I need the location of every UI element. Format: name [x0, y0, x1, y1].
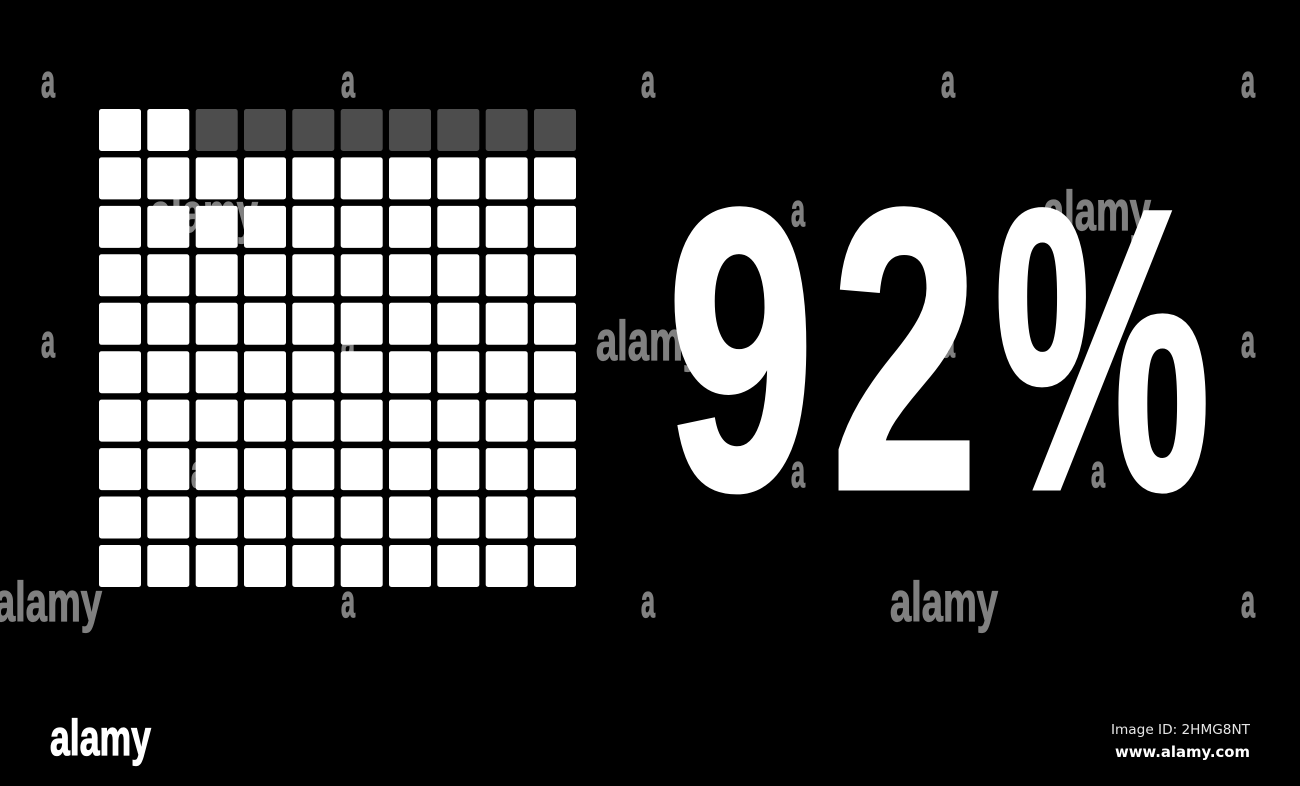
- watermarks: repeated grey alamy marks: alamy: [596, 309, 704, 372]
- watermarks: repeated grey alamy marks: a: [641, 55, 655, 107]
- watermarks: repeated grey alamy marks: a: [1241, 315, 1255, 367]
- watermarks: repeated grey alamy marks: alamy: [1043, 179, 1151, 242]
- watermarks: repeated grey alamy marks: a: [191, 445, 205, 497]
- watermarks: repeated grey alamy marks: a: [1241, 55, 1255, 107]
- large percentage figure: 9: [667, 126, 815, 573]
- watermarks: repeated grey alamy marks: a: [341, 55, 355, 107]
- waffle chart: 92 of 100 squares filled: [99, 109, 576, 587]
- row 1: 2 filled, 8 unfilled: [99, 109, 576, 151]
- watermarks: repeated grey alamy marks: alamy: [150, 181, 258, 244]
- watermarks: repeated grey alamy marks: a: [341, 315, 355, 367]
- watermarks: repeated grey alamy marks: alamy: [890, 570, 998, 633]
- watermarks: repeated grey alamy marks: a: [1091, 445, 1105, 497]
- watermarks: repeated grey alamy marks: a: [941, 55, 955, 107]
- large percentage figure: %: [994, 127, 1211, 574]
- watermarks: repeated grey alamy marks: a: [641, 575, 655, 627]
- rows 2 to 10: all filled: [99, 157, 576, 587]
- website url: www.alamy.com: [1115, 743, 1250, 761]
- large percentage figure: 2: [831, 126, 979, 573]
- watermarks: repeated grey alamy marks: a: [341, 575, 355, 627]
- watermarks: repeated grey alamy marks: a: [791, 184, 805, 236]
- image id text: Image ID: 2HMG8NT: [1111, 723, 1250, 738]
- logo: alamy: alamy: [50, 710, 151, 766]
- watermarks: repeated grey alamy marks: a: [791, 445, 805, 497]
- watermarks: repeated grey alamy marks: a: [1241, 575, 1255, 627]
- watermarks: repeated grey alamy marks: a: [41, 315, 55, 367]
- watermarks: repeated grey alamy marks: a: [41, 55, 55, 107]
- watermarks: repeated grey alamy marks: [0, 55, 1255, 633]
- watermarks: repeated grey alamy marks: a: [941, 315, 955, 367]
- large percentage figure: [667, 126, 1211, 574]
